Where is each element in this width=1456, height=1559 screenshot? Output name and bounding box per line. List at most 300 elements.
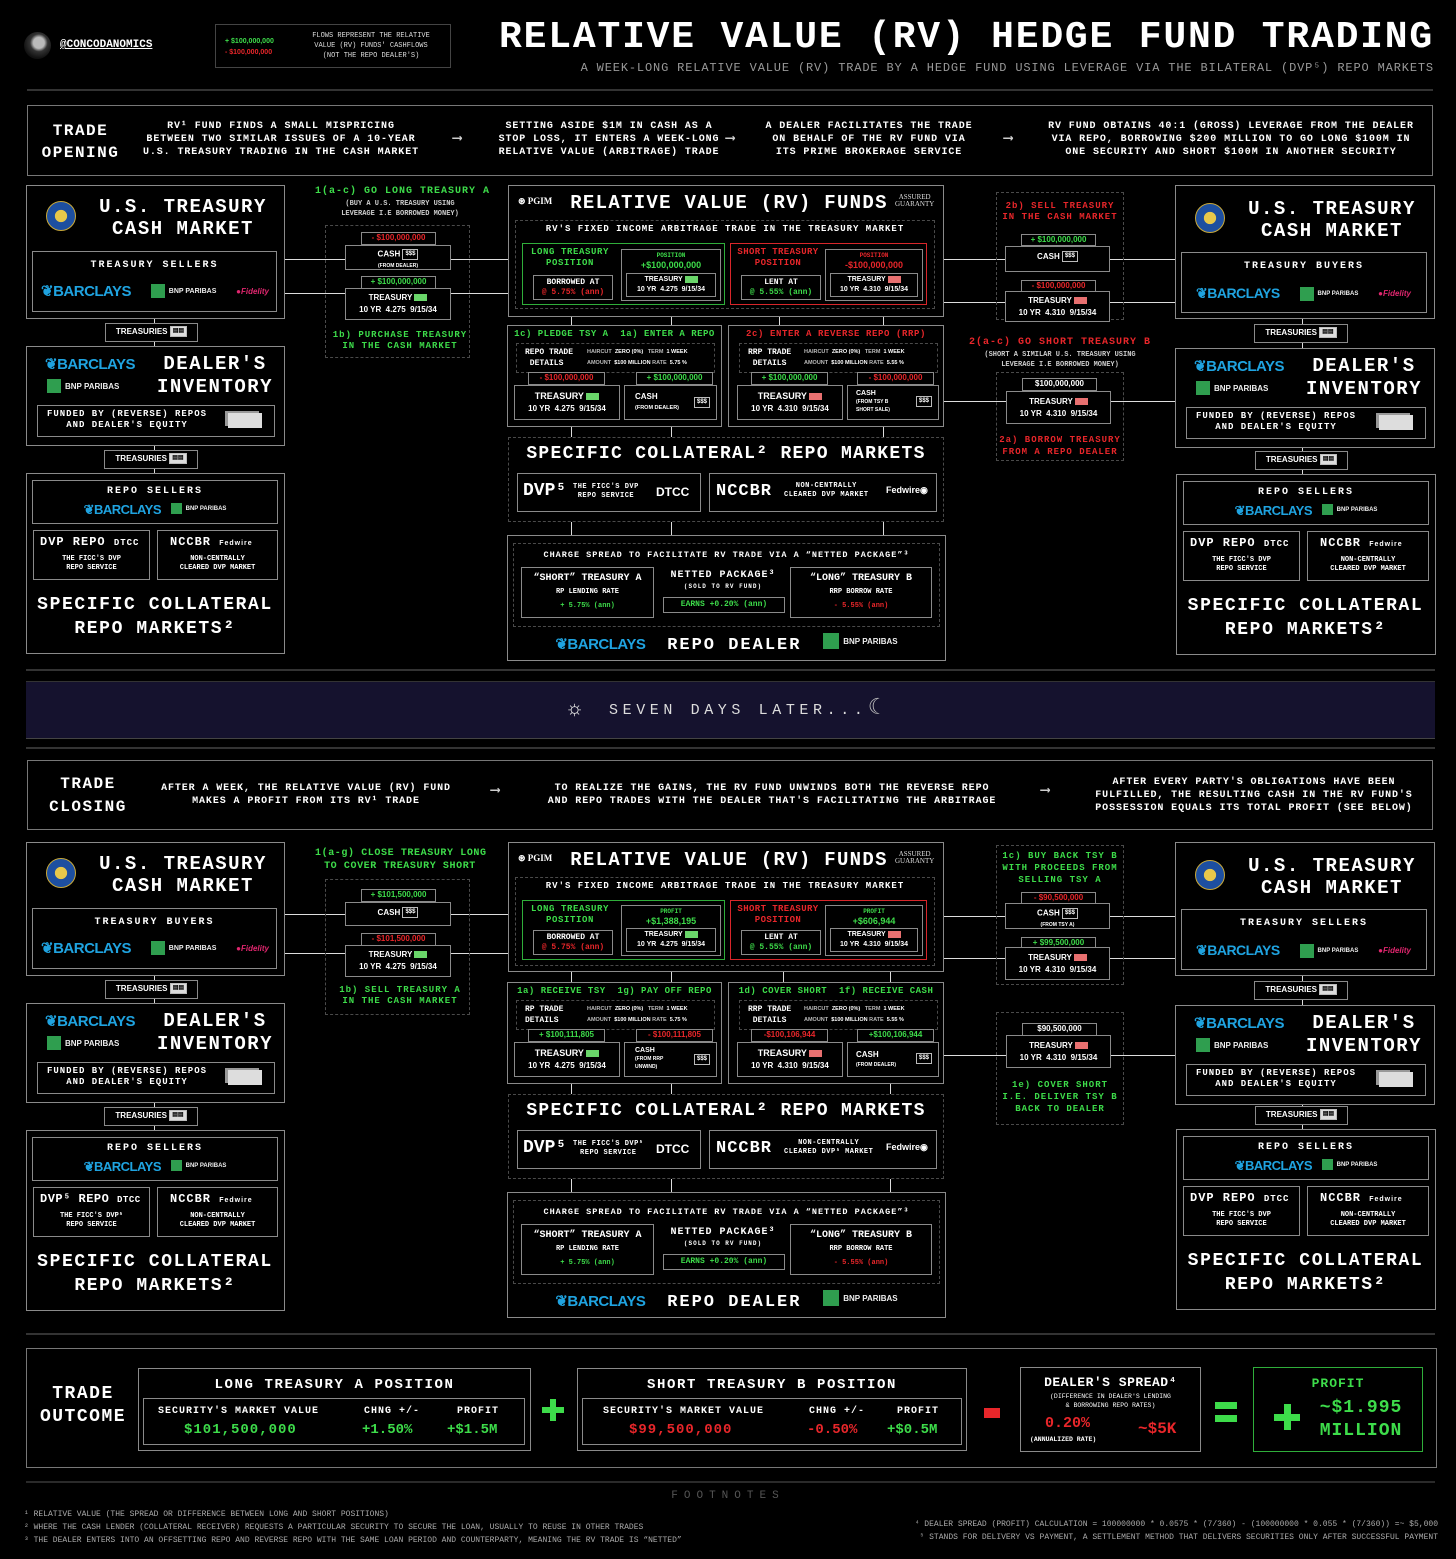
panel: dealer's inventory (left, closing) [26,1003,285,1103]
panel: specific collateral repo markets (right, closing): ❦BARCLAYS [1235,1158,1312,1173]
panel: specific collateral repo markets (right): BNP PARIBAS [1337,506,1377,512]
heading [42,122,119,162]
panel: US treasury cash market (left, closing) [26,842,285,976]
panel: US treasury cash market (right, closing): ●Fidelity [1378,946,1411,955]
panel: repo (left center) [507,325,722,427]
flow: close treasury long [315,848,487,1015]
flow: go short treasury B: TREASURY [1028,296,1072,305]
arrow: ⟶ [1004,131,1012,147]
box: repo sellers: BNP PARIBAS [186,506,226,512]
box: repo sellers [32,480,278,524]
step 1: RV¹ FUND FINDS A SMALL MISPRICING [167,121,395,132]
long treasury position: TREASURY [644,276,683,283]
panel: specific collateral repo markets (center): NON-CENTRALLY [796,482,857,490]
panel: reverse repo (right center) [728,325,944,427]
panel: repo dealer: CHARGE SPREAD TO FACILITATE RV TRADE VIA A “NETTED PACKAGE”³ [543,550,910,560]
panel: specific collateral repo markets (left) [26,473,285,654]
panel: repo dealer: “LONG” TREASURY B [810,573,912,584]
step 4: RV FUND OBTAINS 40:1 (GROSS) LEVERAGE FROM THE DEALER [1048,121,1414,132]
panel: reverse repo unwind (right center): TREASURY [758,1048,807,1058]
panel: trade outcome: OUTCOME [40,1407,126,1427]
cash box: $$$ [405,251,415,257]
short treasury position: SHORT TREASURY [737,247,819,257]
profit: MILLION [1320,1421,1402,1441]
long treasury position: 10 YR 4.275 9/15/34 [637,286,705,293]
flow: go short treasury B: (SHORT A SIMILAR U.S. TREASURY USING [984,351,1136,359]
panel: RV funds [508,185,944,317]
box: DVP repo: THE FICC'S DVP [62,555,121,563]
label: treasuries: ▤▤ [172,455,184,461]
label: treasuries: ▤▤ [173,328,184,334]
panel: RV funds: ASSURED [899,193,931,201]
panel: repo dealer: ❦BARCLAYS REPO DEALER [555,636,801,655]
panel: specific collateral repo markets (center, closing): DVP⁵ [523,1138,566,1158]
panel: repo unwind (left center) [507,982,722,1084]
panel: specific collateral repo markets (left, closing): BNP PARIBAS [186,1162,226,1168]
panel: repo dealer (closing): ❦BARCLAYS REPO DEALER [555,1293,801,1312]
long treasury A position: $101,500,000 [184,1422,297,1438]
arrow: ⟶ [453,131,461,147]
footnotes left: ³ THE DEALER ENTERS INTO AN OFFSETTING REPO AND REVERSE REPO WITH THE SAME LOAN PERIOD AND COUNTERPARTY, MEANING THE RV TRADE IS “NETTED” [24,1536,682,1545]
panel: reverse repo unwind (right center): HAIRCUT ZERO (0%) TERM 1 WEEK [804,1006,905,1012]
panel: repo unwind (left center): UNWIND) [635,1064,657,1070]
box: funded by [37,405,275,437]
long treasury A position [138,1368,531,1451]
step 2: SETTING ASIDE $1M IN CASH AS A [505,121,713,132]
panel: repo dealer (closing): CHARGE SPREAD TO FACILITATE RV TRADE VIA A “NETTED PACKAGE”³ [543,1207,910,1217]
short treasury position: TREASURY [847,276,886,283]
panel: US treasury cash market (right, closing): TREASURY SELLERS [1240,918,1368,929]
icon: plus [542,1399,564,1421]
flow: go short treasury B: LEVERAGE I.E BORROWED MONEY) [1001,361,1119,369]
dealer's spread [1020,1367,1201,1452]
icon: treasury seal [46,201,76,231]
panel: trade closing: CLOSING [49,798,127,816]
label: treasuries [1254,324,1348,343]
panel: repo (left center): DETAILS [530,359,563,368]
panel: reverse repo (right center): 10 YR 4.310 9/15/34 [751,404,829,413]
short treasury position: @ 5.55% (ann) [750,288,812,297]
flow: go short treasury B: - $100,000,000 [1032,281,1085,290]
panel: reverse repo unwind (right center): 10 YR 4.310 9/15/34 [751,1061,829,1070]
panel: repo dealer: (SOLD TO RV FUND) [684,583,762,590]
flow: buy back tsy B and cover short: 10 YR 4.310 9/15/34 [1019,965,1096,974]
box: treasury sellers: ❦BARCLAYS [41,283,131,300]
step 4: VIA REPO, BORROWING $200 MILLION TO GO LONG $100M IN [1052,134,1410,145]
box: DVP repo [33,530,150,580]
flow: go long treasury A: + $100,000,000 [371,277,426,286]
panel: US treasury cash market (left, closing): TREASURY BUYERS [94,917,214,928]
box: DVP repo: DVP REPO DTCC [40,535,139,549]
flow: buy back tsy B and cover short: SELLING TSY A [1018,875,1102,885]
flow: go long treasury A: IN THE CASH MARKET [342,341,458,351]
flow: buy back tsy B and cover short: $90,500,000 [1037,1024,1082,1033]
panel: specific collateral repo markets (right, closing): REPO SELLERS [1258,1142,1354,1153]
short position profit: POSITION [755,915,801,925]
panel: trade closing: POSSESSION EQUALS ITS TOTAL PROFIT (SEE BELOW) [1095,803,1413,814]
panel: RV funds: RV'S FIXED INCOME ARBITRAGE TRADE IN THE TREASURY MARKET [546,224,904,234]
short treasury B position: -0.50% [807,1422,857,1438]
short position profit: PROFIT [863,908,885,915]
flow: close treasury long: 1b) SELL TREASURY A [339,985,461,995]
panel: dealer's inventory (left): ❦BARCLAYS [45,356,135,373]
step 4 [1048,120,1414,158]
short position profit: SHORT TREASURY [737,904,819,914]
short treasury B position: SECURITY'S MARKET VALUE [603,1406,764,1417]
panel: reverse repo (right center): CASH [856,390,876,397]
heading: OPENING [42,144,119,162]
panel: specific collateral repo markets (right, closing): NCCBR Fedwire [1320,1191,1403,1205]
flow: buy back tsy B and cover short [996,845,1124,1125]
panel: RV funds (closing) [508,842,944,972]
panel: specific collateral repo markets (center): SPECIFIC COLLATERAL² REPO MARKETS [526,444,926,464]
panel: US treasury cash market (right, closing): ❦BARCLAYS [1196,942,1280,958]
panel: repo (left center): HAIRCUT ZERO (0%) TERM 1 WEEK [587,349,688,355]
box: NCCBR: NON-CENTRALLY [190,555,245,563]
banner: seven days later: SEVEN DAYS LATER... [609,702,867,719]
dealer's spread: ~$5K [1138,1420,1176,1438]
step 3: A DEALER FACILITATES THE TRADE [765,121,973,132]
panel: specific collateral repo markets (center, closing): Fedwire◉ [886,1142,928,1152]
label: treasuries: TREASURIES [115,454,167,463]
heading: CASH MARKET [112,218,254,240]
flow: buy back tsy B and cover short: I.E. DELIVER TSY B [1002,1092,1118,1102]
panel: specific collateral repo markets (center): DTCC [656,485,689,499]
panel: repo (left center): CASH [635,392,658,401]
panel: repo (left center): $$$ [697,399,707,405]
step 1 [143,120,419,158]
panel: reverse repo (right center): RRP TRADE [748,348,791,357]
panel: dealer's inventory (right): BNP PARIBAS [1214,384,1268,392]
panel: repo dealer (closing): RRP BORROW RATE [829,1245,892,1253]
panel: repo unwind (left center): $$$ [697,1056,707,1062]
flow: buy back tsy B and cover short: TREASURY [1029,1041,1073,1050]
panel: repo dealer (closing) [507,1192,946,1318]
panel: repo dealer: NETTED PACKAGE³ [670,570,776,581]
panel: repo dealer (closing): RP LENDING RATE [556,1245,619,1253]
panel: reverse repo unwind (right center): DETAILS [753,1016,786,1025]
panel: specific collateral repo markets (center): CLEARED DVP MARKET [784,491,869,499]
panel: repo unwind (left center): (FROM RRP [635,1056,663,1062]
panel: reverse repo (right center): TREASURY [758,391,807,401]
panel: repo (left center): 10 YR 4.275 9/15/34 [528,404,606,413]
long treasury A position: PROFIT [457,1406,499,1417]
panel: specific collateral repo markets (right, closing): REPO SERVICE [1216,1220,1267,1228]
panel: specific collateral repo markets (center, closing): NCCBR [716,1139,772,1158]
panel: dealer's inventory (right, closing): FUNDED BY (REVERSE) REPOS [1196,1068,1356,1078]
flow: go long treasury A: LEVERAGE I.E BORROWED MONEY) [341,210,459,218]
panel: specific collateral repo markets (left, closing): REPO SERVICE [66,1221,117,1229]
panel: reverse repo (right center): 2c) ENTER A REVERSE REPO (RRP) [746,329,926,339]
step 3: ITS PRIME BROKERAGE SERVICE [776,147,962,158]
box: treasury sellers: BNP PARIBAS [169,288,216,294]
panel: specific collateral repo markets (left, closing): THE FICC'S DVP⁵ [60,1212,123,1220]
panel: US treasury cash market (left, closing): ❦BARCLAYS [41,940,131,957]
panel: repo dealer [507,535,946,661]
panel: specific collateral repo markets (right): DVP REPO DTCC [1190,536,1289,550]
panel: repo (left center): 1c) PLEDGE TSY A 1a) ENTER A REPO [514,329,715,339]
box: NCCBR [157,530,278,580]
panel: reverse repo unwind (right center) [728,982,944,1084]
step 3: ON BEHALF OF THE RV FUND VIA [772,134,966,145]
step 1: U.S. TREASURY TRADING IN THE CASH MARKET [143,147,419,158]
box: DVP repo: REPO SERVICE [66,564,117,572]
heading: DEALER'S [163,353,267,375]
legend [215,24,451,68]
panel: reverse repo (right center): DETAILS [753,359,786,368]
panel: repo unwind (left center): AMOUNT $100 MILLION RATE 5.75 % [587,1017,687,1023]
panel: repo unwind (left center): - $100,111,805 [648,1030,701,1039]
long treasury position: @ 5.75% (ann) [542,288,604,297]
short treasury B position: +$0.5M [887,1422,937,1438]
panel: specific collateral repo markets (right): REPO SELLERS [1258,487,1354,498]
panel: specific collateral repo markets (center): Fedwire◉ [886,485,928,495]
section: trade closing diagram [26,842,1436,1318]
panel: reverse repo (right center): AMOUNT $100 MILLION RATE 5.55 % [804,360,904,366]
header: handle [24,32,152,59]
panel: repo dealer: - 5.55% (ann) [834,602,888,610]
long treasury position: POSITION [657,252,685,259]
long position profit [522,900,725,960]
long treasury position: LONG TREASURY [531,247,609,257]
label: treasuries: ▤▤ [173,985,184,991]
flow: buy back tsy B and cover short: WITH PROCEEDS FROM [1002,863,1118,873]
box: repo sellers: REPO SELLERS [107,486,203,497]
panel: specific collateral repo markets (center, closing): DTCC [656,1142,689,1156]
panel: specific collateral repo markets (right) [1176,474,1436,655]
panel: dealer's inventory (right) [1175,348,1435,448]
footnotes left: ² WHERE THE CASH LENDER (COLLATERAL RECEIVER) REQUESTS A PARTICULAR SECURITY TO SECURE THE LOAN, USUALLY TO REUSE IN OTHER TRADES [24,1523,643,1532]
label: treasuries: ▤▤ [1322,986,1334,992]
long treasury position: BORROWED AT [547,278,599,287]
footnotes left: ¹ RELATIVE VALUE (THE SPREAD OR DIFFERENCE BETWEEN LONG AND SHORT POSITIONS) [24,1510,389,1519]
flow: go short treasury B: TREASURY [1029,397,1073,406]
label: treasuries: ▤▤ [1323,456,1334,462]
panel: repo (left center): REPO TRADE [525,348,573,357]
panel: specific collateral repo markets (right, closing) [1176,1129,1436,1310]
long treasury position [522,243,725,305]
panel: specific collateral repo markets (center): NCCBR [716,482,772,501]
label: treasuries [105,980,198,999]
legend: + $100,000,000 [225,38,274,45]
panel: repo unwind (left center): 10 YR 4.275 9/15/34 [528,1061,606,1070]
panel: dealer's inventory (left) [26,346,285,446]
label: treasuries: TREASURIES [116,984,167,993]
footnotes right: ⁴ DEALER SPREAD (PROFIT) CALCULATION = 100000000 * 0.0575 * (7/360) - (100000000 * 0.055 * (7/360)) =~ $5,000 [915,1520,1438,1529]
panel: specific collateral repo markets (left, closing): SPECIFIC COLLATERAL [37,1252,273,1272]
long treasury position: +$100,000,000 [641,260,701,270]
panel: repo dealer: BNP PARIBAS [843,636,898,646]
short position profit: 10 YR 4.310 9/15/34 [840,941,908,948]
panel: reverse repo unwind (right center): 1d) COVER SHORT 1f) RECEIVE CASH [739,986,933,996]
panel: trade closing: FULFILLED, THE RESULTING CASH IN THE RV FUND'S [1095,790,1413,801]
panel: US treasury cash market (left, closing): ●Fidelity [236,944,269,952]
flow: buy back tsy B and cover short: $$$ [1065,910,1075,916]
panel: dealer's inventory (right, closing): INVENTORY [1306,1035,1422,1057]
flow: buy back tsy B and cover short: (FROM TSY A) [1041,922,1074,928]
step 4: ONE SECURITY AND SHORT $100M IN ANOTHER SECURITY [1065,147,1397,158]
profit: ~$1.995 [1320,1398,1402,1418]
flow: close treasury long: $$$ [405,909,415,915]
panel: RV funds (closing): GUARANTY [895,857,934,865]
panel: reverse repo (right center): + $100,000,000 [762,373,817,382]
legend: VALUE (RV) FUNDS' CASHFLOWS [314,42,428,50]
label: treasuries [1254,981,1348,1000]
panel: repo (left center): TREASURY [535,391,584,401]
panel: US treasury cash market (left) [26,185,285,319]
panel: specific collateral repo markets (center, closing): NON-CENTRALLY [798,1139,859,1147]
panel: repo dealer (closing): - 5.55% (ann) [834,1259,888,1267]
label: treasuries [1255,451,1348,470]
treasury box [345,288,451,320]
long treasury A position: +$1.5M [447,1422,497,1438]
label: treasuries [104,450,198,469]
step 2: RELATIVE VALUE (ARBITRAGE) TRADE [499,147,719,158]
long treasury A position: LONG TREASURY A POSITION [214,1377,455,1393]
panel: repo dealer (closing): (SOLD TO RV FUND) [684,1240,762,1247]
label: treasuries: TREASURIES [1266,455,1317,464]
icon: moon: ☾ [868,696,881,721]
panel: dealer's inventory (left, closing): AND DEALER'S EQUITY [66,1077,188,1087]
panel: specific collateral repo markets (right): REPO SERVICE [1216,565,1267,573]
flow: close treasury long: TREASURY [369,950,412,959]
flow: close treasury long: 10 YR 4.275 9/15/34 [359,962,437,971]
panel: US treasury cash market (right, closing) [1175,842,1435,976]
panel: repo unwind (left center): DETAILS [525,1016,559,1025]
cash box: CASH [378,250,400,259]
panel: specific collateral repo markets (center, closing): THE FICC'S DVP⁵ [573,1140,644,1148]
short treasury position: 10 YR 4.310 9/15/34 [840,286,908,293]
panel: reverse repo (right center): HAIRCUT ZERO (0%) TERM 1 WEEK [804,349,905,355]
heading: RELATIVE VALUE (RV) FUNDS [570,192,888,214]
long position profit: @ 5.75% (ann) [542,943,604,952]
panel: reverse repo (right center): (FROM TSY B [856,399,888,405]
panel: specific collateral repo markets (right): NON-CENTRALLY [1341,556,1395,564]
panel: repo unwind (left center): RP TRADE [525,1005,563,1014]
heading: INVENTORY [157,376,273,398]
flow: go short treasury B: IN THE CASH MARKET [1002,212,1118,222]
panel: trade closing [27,760,1433,830]
panel: specific collateral repo markets (center, closing): CLEARED DVP⁵ MARKET [784,1148,873,1156]
short treasury position: POSITION [755,258,801,268]
flow: go short treasury B: FROM A REPO DEALER [1002,447,1118,457]
label: treasuries [105,323,198,342]
long position profit: POSITION [546,915,594,925]
icon: minus [984,1408,1000,1418]
flow: buy back tsy B and cover short: TREASURY [1028,953,1072,962]
panel: trade closing: AND REPO TRADES WITH THE DEALER THAT'S FACILITATING THE ARBITRAGE [548,796,996,807]
long position profit: 10 YR 4.275 9/15/34 [637,941,705,948]
panel: repo dealer: + 5.75% (ann) [560,602,615,610]
flow: go long treasury A: 1b) PURCHASE TREASURY [333,330,467,340]
panel: US treasury cash market (right, closing): CASH MARKET [1261,877,1403,899]
panel: repo dealer: EARNS +0.20% (ann) [681,600,767,609]
panel: repo dealer (closing): “SHORT” TREASURY A [533,1230,642,1241]
long position profit: TREASURY [644,931,683,938]
panel: specific collateral repo markets (center, closing) [508,1094,944,1179]
panel: repo unwind (left center): CASH [635,1047,655,1054]
panel: RV funds (closing): ⊛ PGIM [518,853,552,863]
label: treasuries: TREASURIES [115,1111,167,1120]
short position profit: LENT AT [764,933,798,942]
flow: close treasury long: TO COVER TREASURY SHORT [324,861,476,872]
long treasury position: POSITION [546,258,594,268]
dealer's spread: 0.20% [1045,1415,1090,1432]
flow: go short treasury B: 2a) BORROW TREASURY [999,435,1121,445]
panel: specific collateral repo markets (left, closing): REPO MARKETS² [74,1276,236,1296]
flow: close treasury long: IN THE CASH MARKET [342,996,458,1006]
panel: trade outcome [26,1348,1437,1468]
box: NCCBR: NCCBR Fedwire [170,535,253,549]
flow: go long treasury A: - $100,000,000 [372,233,425,242]
panel: repo dealer (closing): NETTED PACKAGE³ [670,1227,776,1238]
heading: U.S. TREASURY [99,196,267,218]
dealer's spread: & BORROWING REPO RATES) [1066,1402,1155,1409]
panel: dealer's inventory (right): AND DEALER'S EQUITY [1215,422,1337,432]
panel: repo (left center): - $100,000,000 [540,373,593,382]
panel: dealer's inventory (left, closing): FUNDED BY (REVERSE) REPOS [47,1066,207,1076]
panel: trade closing: MAKES A PROFIT FROM ITS RV¹ TRADE [192,796,420,807]
short position profit: +$606,944 [853,916,895,926]
flow: go short treasury B: 2(a-c) GO SHORT TREASURY B [969,337,1151,348]
long treasury A position: CHNG +/- [364,1406,420,1417]
step 3 [765,121,973,158]
panel: dealer's inventory (right, closing) [1175,1005,1435,1105]
short treasury B position: PROFIT [897,1406,939,1417]
panel: specific collateral repo markets (left, closing): NCCBR Fedwire [170,1192,253,1206]
footnotes heading: FOOTNOTES [671,1490,785,1502]
flow: buy back tsy B and cover short: 1c) BUY BACK TSY B [1002,851,1118,861]
panel: repo dealer (closing): EARNS +0.20% (ann) [681,1257,767,1266]
step 2: STOP LOSS, IT ENTERS A WEEK-LONG [499,134,719,145]
flow: go short treasury B: + $100,000,000 [1031,235,1086,244]
icon: equals [1215,1402,1237,1422]
legend: - $100,000,000 [225,49,272,56]
panel: RV funds: GUARANTY [895,200,934,208]
label: treasuries: TREASURIES [1265,328,1317,337]
footnotes right [915,1520,1438,1542]
panel: repo (left center): + $100,000,000 [647,373,702,382]
flow: go short treasury B: $$$ [1065,253,1075,259]
panel: trade closing: TO REALIZE THE GAINS, THE RV FUND UNWINDS BOTH THE REVERSE REPO [555,783,989,794]
panel: US treasury cash market (right, closing): BNP PARIBAS [1318,948,1358,954]
panel: dealer's inventory (left, closing): INVENTORY [157,1033,273,1055]
cash box [345,245,451,270]
label: treasuries: ▤▤ [172,1112,184,1118]
panel: trade closing: AFTER EVERY PARTY'S OBLIGATIONS HAVE BEEN [1113,777,1395,788]
dealer's spread: DEALER'S SPREAD⁴ [1044,1375,1177,1390]
long position profit: +$1,388,195 [646,916,696,926]
flow: close treasury long: + $101,500,000 [371,890,426,899]
panel: specific collateral repo markets (left, closing): REPO SELLERS [107,1143,203,1154]
panel: specific collateral repo markets (right): SPECIFIC COLLATERAL [1188,596,1423,616]
short treasury B position: SHORT TREASURY B POSITION [647,1377,897,1393]
panel: reverse repo unwind (right center): RRP TRADE [748,1005,791,1014]
panel: repo dealer: RRP BORROW RATE [829,588,892,596]
banner: seven days later [26,681,1435,739]
panel: US treasury cash market (right): ●Fidelity [1378,289,1411,298]
flow: go long treasury A: 1(a-c) GO LONG TREASURY A [315,186,490,197]
panel: specific collateral repo markets (right): THE FICC'S DVP [1212,556,1271,564]
short position profit: TREASURY [847,931,886,938]
footnotes right: ⁵ STANDS FOR DELIVERY VS PAYMENT, A SETTLEMENT METHOD THAT DELIVERS SECURITIES ONLY AFTER SUCCESSFUL PAYMENT [920,1533,1438,1542]
short treasury position: LENT AT [764,278,798,287]
short treasury B position [577,1368,967,1451]
box: funded by: FUNDED BY (REVERSE) REPOS [47,409,207,419]
long position profit: PROFIT [660,908,682,915]
flow: go short treasury B: $100,000,000 [1035,379,1084,388]
panel: reverse repo unwind (right center): AMOUNT $100 MILLION RATE 5.55 % [804,1017,904,1023]
